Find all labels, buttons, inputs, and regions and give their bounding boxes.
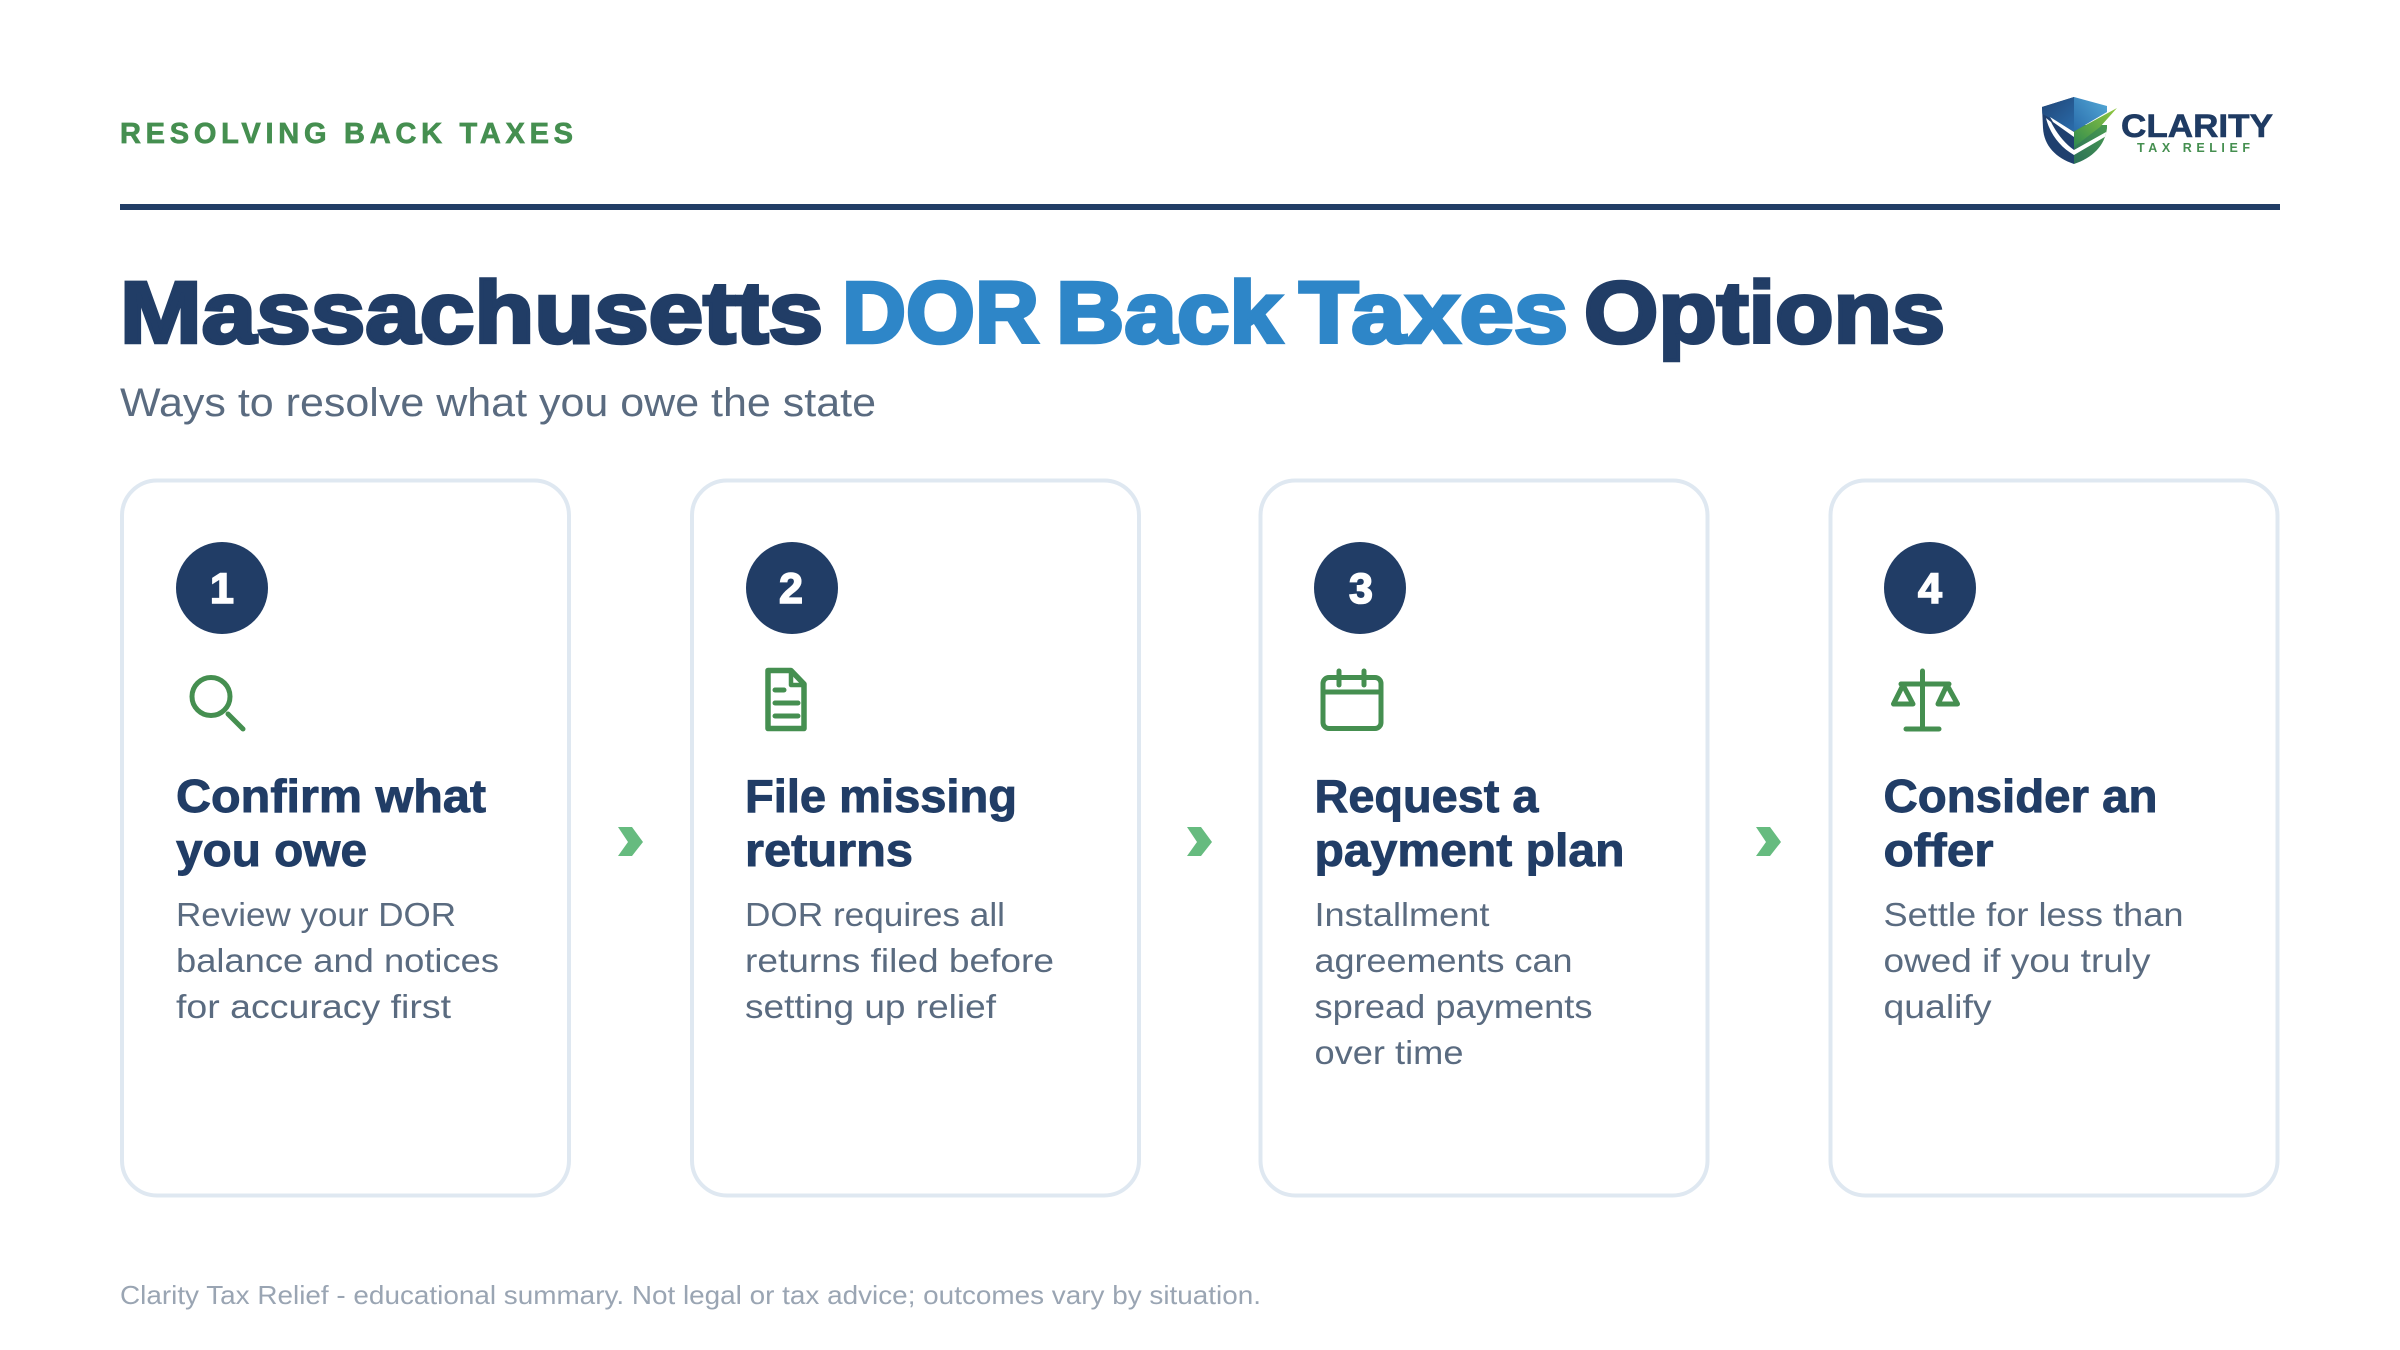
heading: offer [1884,824,1994,876]
panel: step 1 [122,480,569,1196]
heading: Consider an [1884,770,2158,822]
description: returns filed before [745,942,1054,979]
step number 1 [176,542,268,634]
title: Taxes [1299,264,1568,362]
panel: step 2 [692,480,1139,1196]
icon: calendar [1323,671,1381,728]
description [1314,896,1592,1071]
logo tagline: TAX RELIEF [2137,141,2250,155]
arrow 3 to 4 [1756,827,1781,856]
title: Massachusetts [120,264,823,362]
step number 2: 2 [779,565,803,613]
description: Settle for less than [1884,896,2184,933]
icon: balance scales [1894,671,1958,729]
description: agreements can [1314,942,1572,979]
description: spread payments [1314,988,1592,1025]
heading: Request a [1314,770,1539,822]
heading: File missing [745,770,1017,822]
panel: step 3 [1260,480,1708,1196]
heading: payment plan [1314,824,1624,876]
subtitle: Ways to resolve what you owe the state [120,381,876,425]
arrow 2 to 3 [1187,827,1212,856]
heading [1884,770,2158,876]
description: DOR requires all [745,896,1005,933]
eyebrow label: RESOLVING BACK TAXES [120,118,573,150]
step number 2 [746,542,838,634]
logo wordmark: CLARITY [2121,108,2273,144]
step number 3 [1314,542,1406,634]
description [745,896,1054,1025]
arrow 1 to 2 [618,827,643,856]
description: setting up relief [745,988,997,1025]
description [1884,896,2184,1025]
footer disclaimer: Clarity Tax Relief - educational summary. Not legal or tax advice; outcomes vary by situation. [120,1280,1261,1310]
description: Installment [1314,896,1490,933]
title: Back [1056,264,1282,362]
heading [745,770,1017,876]
panel: step 4 [1830,480,2278,1196]
icon: shield with check [2042,97,2117,164]
description: over time [1314,1034,1464,1071]
step number 3: 3 [1349,565,1373,613]
description: qualify [1884,988,1992,1025]
title: Options [1584,264,1945,362]
description: balance and notices [176,942,499,979]
title: DOR [842,264,1039,362]
heading [1314,770,1624,876]
heading: returns [745,824,913,876]
description: Review your DOR [176,896,456,933]
heading [176,770,486,876]
description: owed if you truly [1884,942,2151,979]
description [176,896,499,1025]
description: for accuracy first [176,988,451,1025]
step number 4 [1884,542,1976,634]
heading: Confirm what [176,770,486,822]
logo: Clarity Tax Relief [2035,95,2273,167]
heading: you owe [176,824,367,876]
icon: document [768,670,804,728]
step number 1: 1 [210,565,234,613]
icon: magnifying glass [192,678,243,729]
step number 4: 4 [1918,565,1942,613]
title [120,264,1945,362]
header rule [120,204,2280,210]
